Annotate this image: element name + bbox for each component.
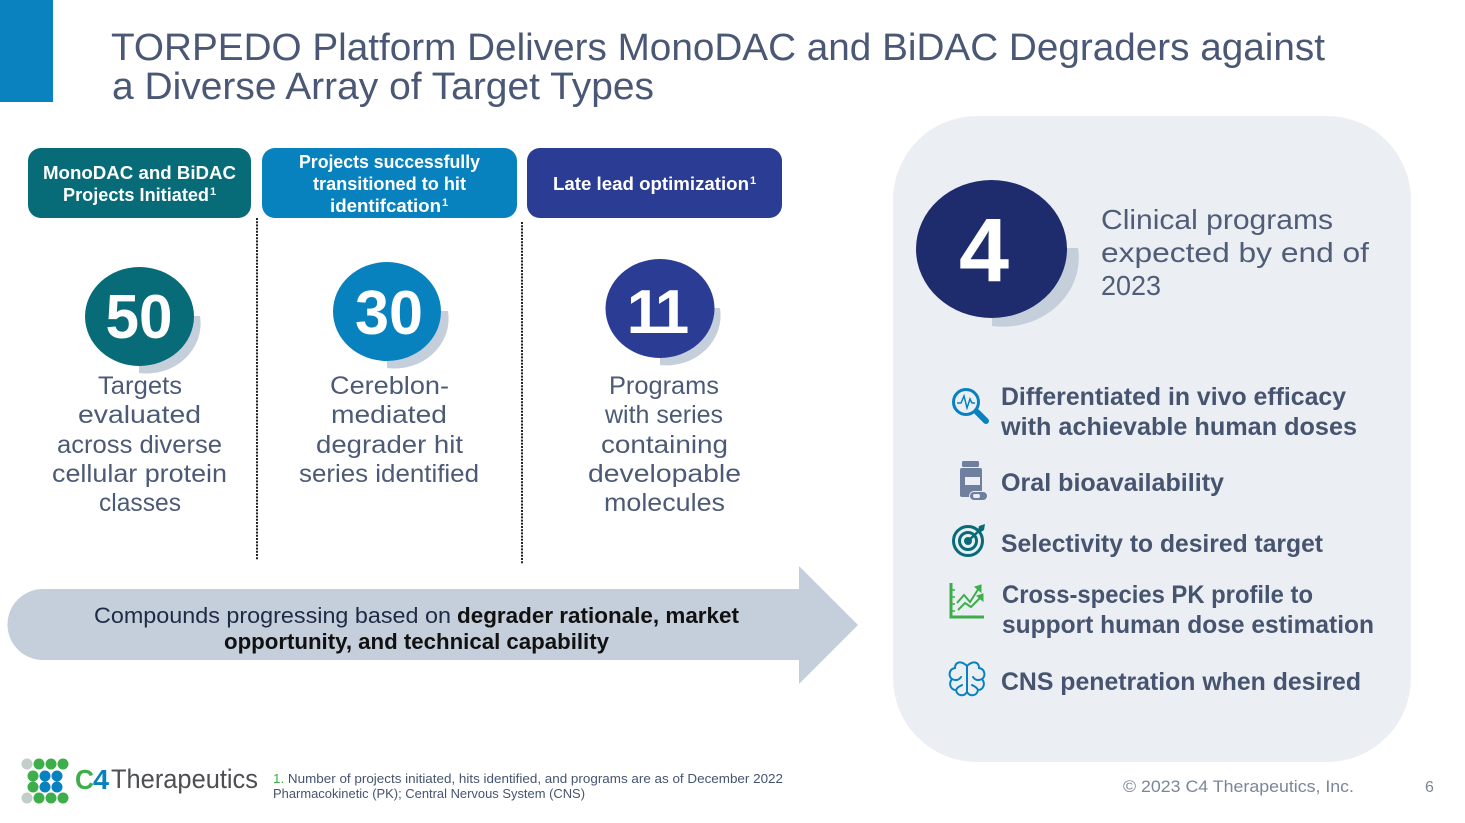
column 2 header: transitioned to hit (313, 174, 466, 194)
title: a Diverse Array of Target Types (112, 66, 654, 108)
stat: 30 hit series: series identified (299, 460, 479, 488)
icon: magnifier with pulse (954, 390, 986, 421)
stat: 50 targets: Targets (98, 372, 182, 400)
column 3 header: 1 (750, 175, 756, 187)
column 2 header: Projects successfully (299, 152, 480, 172)
footnote: 1. Number of projects initiated, hits identified, and programs are as of December 2022 (273, 771, 783, 786)
logo: C4 Therapeutics: Therapeutics (111, 764, 258, 794)
text: cross-species PK (1002, 581, 1374, 639)
title (111, 27, 1325, 108)
stat: 50 targets: cellular protein (52, 460, 227, 488)
column 1 header: Projects Initiated (63, 185, 209, 205)
text: oral bioavailability: Oral bioavailability (1001, 469, 1224, 497)
stat: 50 targets (52, 267, 227, 517)
column 1 header (28, 148, 251, 218)
text: cross-species PK: support human dose estimation (1002, 611, 1374, 639)
stat: 11 programs: 1 (655, 278, 689, 347)
stat: 30 hit series: mediated (331, 401, 447, 429)
text: in vivo efficacy: with achievable human doses (1000, 413, 1357, 441)
column 2 header (262, 148, 517, 218)
text: in vivo efficacy: Differentiated in vivo efficacy (1001, 383, 1346, 411)
stat: 11 programs: developable (588, 460, 741, 488)
stat: 30 hit series: Cereblon- (330, 372, 449, 400)
stat: 4 clinical programs (916, 180, 1369, 327)
stat: 50 targets: evaluated (78, 401, 201, 429)
column 2 header: identifcation (330, 196, 441, 216)
corner accent block (0, 0, 53, 102)
stat: 11 programs (588, 259, 741, 517)
footnote (273, 771, 783, 801)
progress arrow: opportunity, and technical capability (224, 629, 610, 654)
text: cross-species PK: Cross-species PK profile to (1002, 581, 1313, 609)
stat: 4 clinical programs: 2023 (1101, 270, 1161, 301)
logo: C4 Therapeutics: 4 (93, 764, 109, 795)
progress arrow: degrader rationale, market (457, 603, 740, 628)
stat: 50 targets: classes (99, 489, 181, 517)
stat: 50 targets: 50 (106, 283, 172, 352)
progress arrow (7, 566, 858, 684)
panel: clinical programs and properties (893, 116, 1411, 762)
icon: brain (950, 662, 984, 695)
progress arrow: Compounds progressing based on (94, 603, 451, 628)
page number: 6 (1425, 779, 1434, 796)
stat: 4 clinical programs: Clinical programs (1101, 204, 1333, 235)
stat: 4 clinical programs: 4 (959, 201, 1009, 301)
column 1 header: MonoDAC and BiDAC (43, 163, 236, 183)
column 2 header: 1 (442, 197, 448, 209)
text: selectivity: Selectivity to desired target (1001, 530, 1324, 558)
text: in vivo efficacy (1000, 383, 1357, 441)
logo: C4 Therapeutics: C (75, 764, 94, 795)
icon: pill bottle (960, 461, 988, 500)
stat: 30 hit series (299, 262, 479, 488)
stat: 11 programs: Programs (609, 372, 719, 400)
stat: 11 programs: 1 (627, 278, 661, 347)
column 3 header (527, 148, 782, 218)
column 1 header: 1 (210, 186, 216, 198)
logo: C4 Therapeutics (22, 758, 258, 804)
icon: target (954, 524, 985, 556)
stat: 50 targets: across diverse (57, 431, 222, 459)
icon: growth chart (951, 583, 984, 617)
column dividers (257, 218, 522, 564)
stat: 11 programs: with series (604, 401, 723, 429)
copyright: © 2023 C4 Therapeutics, Inc. (1123, 777, 1354, 796)
footnote: Pharmacokinetic (PK); Central Nervous System (CNS) (273, 786, 585, 801)
stat: 30 hit series: 30 (355, 279, 423, 348)
stat: 30 hit series: degrader hit (316, 431, 463, 459)
stat: 11 programs: containing (601, 431, 728, 459)
title: TORPEDO Platform Delivers MonoDAC and BiDAC Degraders against (111, 27, 1325, 69)
stat: 4 clinical programs: expected by end of (1101, 237, 1369, 268)
stat: 11 programs: molecules (604, 489, 725, 517)
column 3 header: Late lead optimization (553, 174, 749, 194)
text: CNS penetration: CNS penetration when desired (1001, 668, 1361, 696)
